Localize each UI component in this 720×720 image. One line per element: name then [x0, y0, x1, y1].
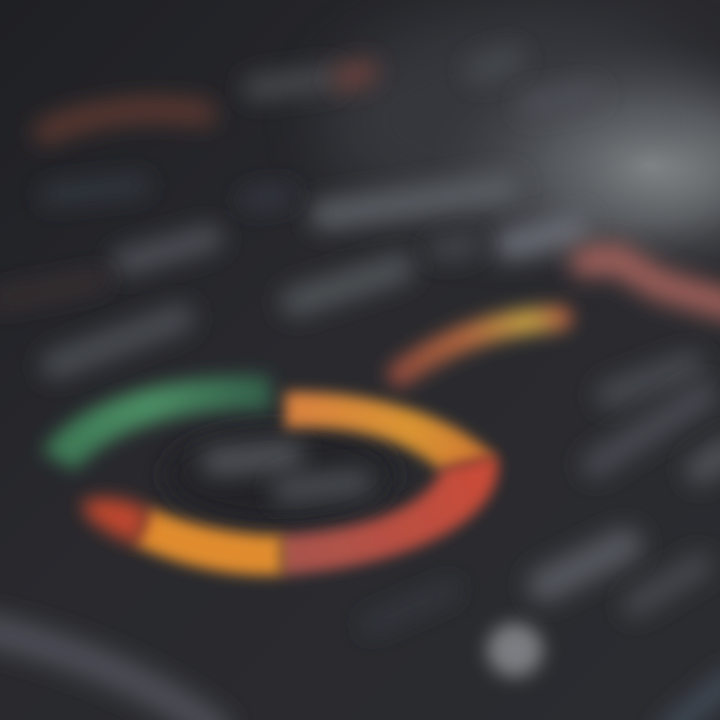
red-orange streak: top left — [45, 110, 205, 132]
icon: blurred white mark — [487, 623, 543, 677]
donut segment: orange top — [285, 392, 496, 470]
donut segment: orange bottom — [135, 508, 282, 575]
donut segment: red right — [280, 455, 498, 575]
donut segment: green — [42, 376, 272, 470]
blurred text rows: right and lower area — [0, 365, 720, 720]
trend line: red, right edge — [585, 258, 720, 305]
trend arrow: yellow-orange flare — [400, 318, 560, 374]
background glow: top right — [320, 10, 720, 290]
blurred text rows: upper area — [0, 60, 590, 365]
donut segment: red left — [82, 498, 150, 545]
donut centre label: blurred — [165, 427, 395, 523]
donut chart — [42, 376, 498, 575]
